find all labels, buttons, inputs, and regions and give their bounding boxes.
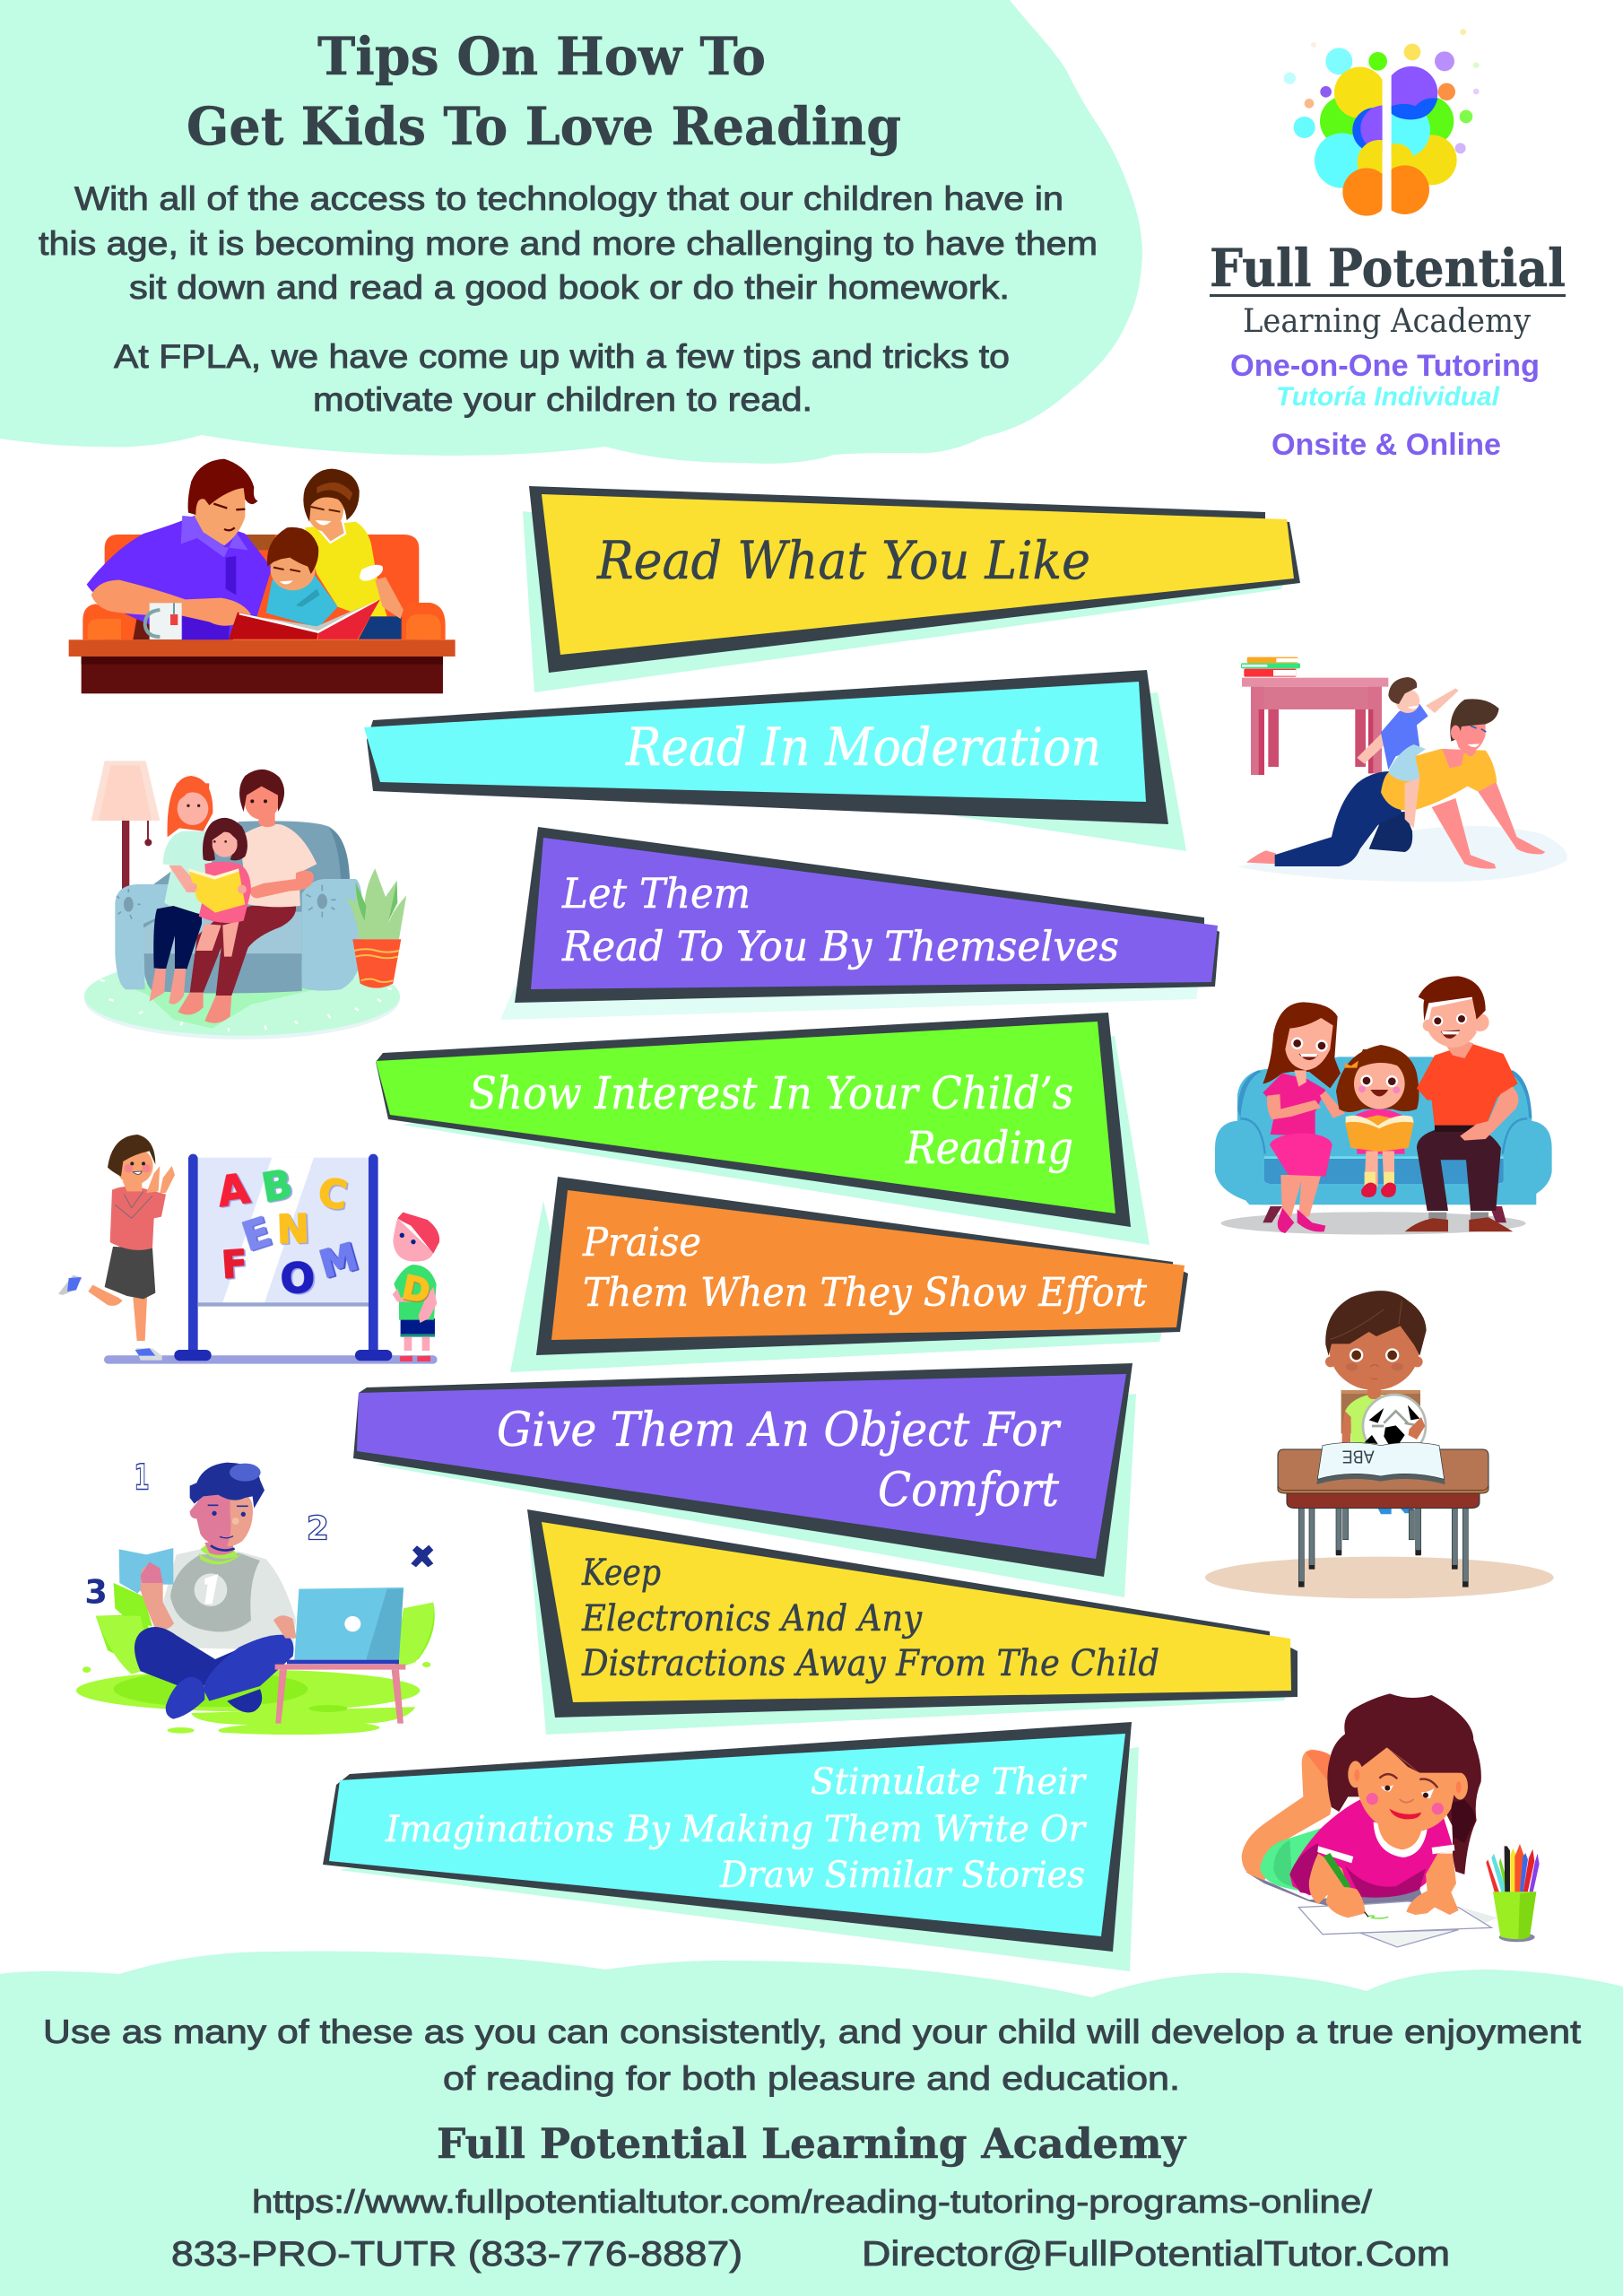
contact details: https://www.fullpotentialtutor.com/reading-tutoring-programs-online/ [252,2183,1372,2220]
banner: give them an object for comfort [353,1363,1136,1597]
closing message: of reading for both pleasure and education. [443,2060,1180,2097]
banner: give them an object for comfort: Give Them An Object For [497,1404,1062,1457]
banner: praise them when they show effort: Praise [582,1220,701,1265]
contact details [171,2183,1450,2274]
intro paragraph [39,180,1098,306]
illustration: teacher and boy at alphabet board: A [214,1165,253,1216]
illustration: boy with laptop and book on grass: 1 [134,1457,150,1498]
banner: show interest in your child's reading: Reading [905,1122,1073,1174]
banner: stimulate their imaginations: Imaginations By Making Them Write Or [385,1809,1088,1850]
intro paragraph: sit down and read a good book or do their homework. [129,269,1010,306]
contact details: 833-PRO-TUTR (833-776-8887) [171,2235,742,2274]
footer academy name: Full Potential Learning Academy [437,2119,1186,2168]
intro paragraph: this age, it is becoming more and more challenging to have them [39,225,1098,262]
banner: keep electronics away: Distractions Away From The Child [581,1643,1159,1684]
intro paragraph two [114,338,1010,418]
illustration: girl drawing on the floor with pencils [1242,1693,1540,1947]
banner: let them read to you [500,827,1219,1020]
title [187,26,901,157]
tutoring tagline: One-on-One Tutoring [1230,349,1540,383]
illustration: father mother and son reading at table [69,459,456,693]
title: Get Kids To Love Reading [187,96,901,157]
illustration: happy family reading on blue sofa [1215,976,1552,1235]
closing message: Use as many of these as you can consistently, and your child will develop a true enjoyment [43,2013,1582,2050]
banner: show interest in your child's reading: Show Interest In Your Child’s [469,1067,1073,1119]
banner: let them read to you: Read To You By Themselves [561,922,1119,970]
tutoring tagline: Onsite & Online [1271,428,1501,462]
illustration: teacher and boy at alphabet board: C [316,1170,350,1219]
banner: keep electronics away: Electronics And Any [581,1598,923,1639]
logo wordmark: Full Potential [1210,238,1566,299]
tutoring tagline [1230,349,1540,462]
banner: show interest in your child's reading [376,1013,1150,1245]
banner: stimulate their imaginations [323,1722,1139,1971]
banner: read in moderation [364,670,1186,851]
illustration: teacher and boy at alphabet board: M [315,1234,362,1287]
intro paragraph two: motivate your children to read. [313,381,812,418]
logo wordmark [1210,238,1566,340]
contact details: Director@FullPotentialTutor.Com [862,2235,1450,2274]
banner: give them an object for comfort: Comfort [878,1464,1059,1518]
logo: colourful brain [1284,29,1480,216]
closing message [43,2013,1582,2097]
banner: read what you like: Read What You Like [596,530,1090,591]
banner: stimulate their imaginations: Stimulate Their [811,1761,1088,1803]
banner: keep electronics away: Keep [581,1552,661,1594]
intro paragraph: With all of the access to technology that our children have in [74,180,1063,217]
illustration: teacher and boy at alphabet board: O [280,1254,316,1303]
illustration: teacher and boy at alphabet board: N [276,1207,310,1253]
illustration: father playing on floor with child on back [1237,657,1567,882]
logo wordmark: Learning Academy [1243,303,1532,340]
banner: praise them when they show effort: Them When They Show Effort [583,1270,1147,1316]
illustration: teacher and boy at alphabet board [58,1135,439,1364]
illustration: boy with laptop and book on grass: 2 [307,1509,329,1548]
banner: let them read to you: Let Them [561,869,751,918]
banner: praise them when they show effort [510,1177,1188,1372]
banner: stimulate their imaginations: Draw Similar Stories [719,1855,1085,1896]
header background blob [0,0,1142,464]
footer background blob [0,1952,1623,2296]
tutoring tagline: Tutoría Individual [1276,382,1500,412]
intro paragraph two: At FPLA, we have come up with a few tips and tricks to [114,338,1010,375]
title: Tips On How To [317,26,766,87]
banner: keep electronics away [527,1509,1298,1735]
illustration: parents and daughter on armchair [84,761,406,1039]
illustration: boy with laptop and book on grass [76,1457,435,1735]
illustration: boy at desk with soccer ball: ABE [1342,1446,1375,1466]
illustration: teacher and boy at alphabet board: B [259,1162,296,1212]
illustration: boy at desk with soccer ball [1205,1291,1554,1598]
illustration: teacher and boy at alphabet board: E [238,1210,276,1260]
banner: read in moderation: Read In Moderation [625,717,1101,778]
banner: read what you like [523,486,1300,692]
illustration: teacher and boy at alphabet board: D [399,1267,433,1311]
illustration: teacher and boy at alphabet board: F [221,1241,248,1287]
illustration: boy with laptop and book on grass: 3 [84,1572,108,1611]
